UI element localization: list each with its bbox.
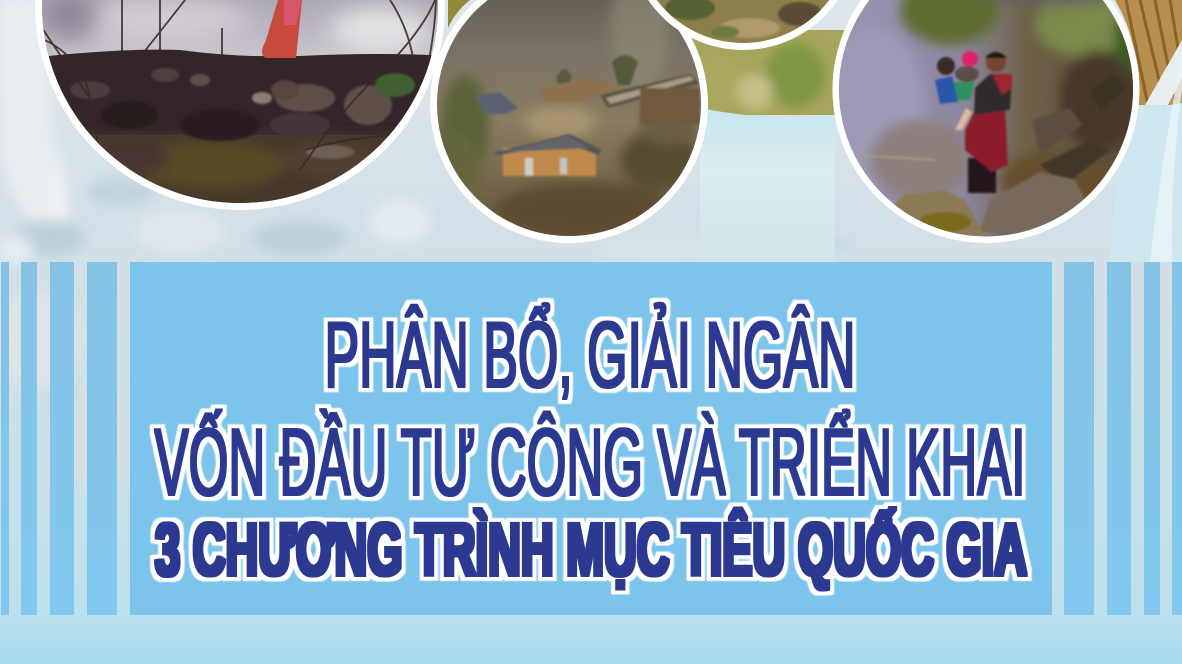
photo circle: burning field with red figure (35, 0, 445, 210)
bottom band (0, 615, 1182, 664)
straw panel top right (1115, 0, 1182, 105)
title panel (130, 262, 1052, 615)
icon: red-clad figure in smoke (262, 0, 302, 58)
pale water wash (700, 50, 1182, 262)
icon: woman carrying children (935, 51, 1012, 193)
decorative side stripes (1, 262, 1182, 615)
photo circle: mother and children by smoking rocks (825, 0, 1143, 243)
photo circle: village houses in haze (430, 0, 708, 243)
icon: orange farmhouse (492, 134, 602, 176)
foliage strip between photos (448, 0, 850, 115)
photo circle: top centre hillside (648, 0, 838, 50)
